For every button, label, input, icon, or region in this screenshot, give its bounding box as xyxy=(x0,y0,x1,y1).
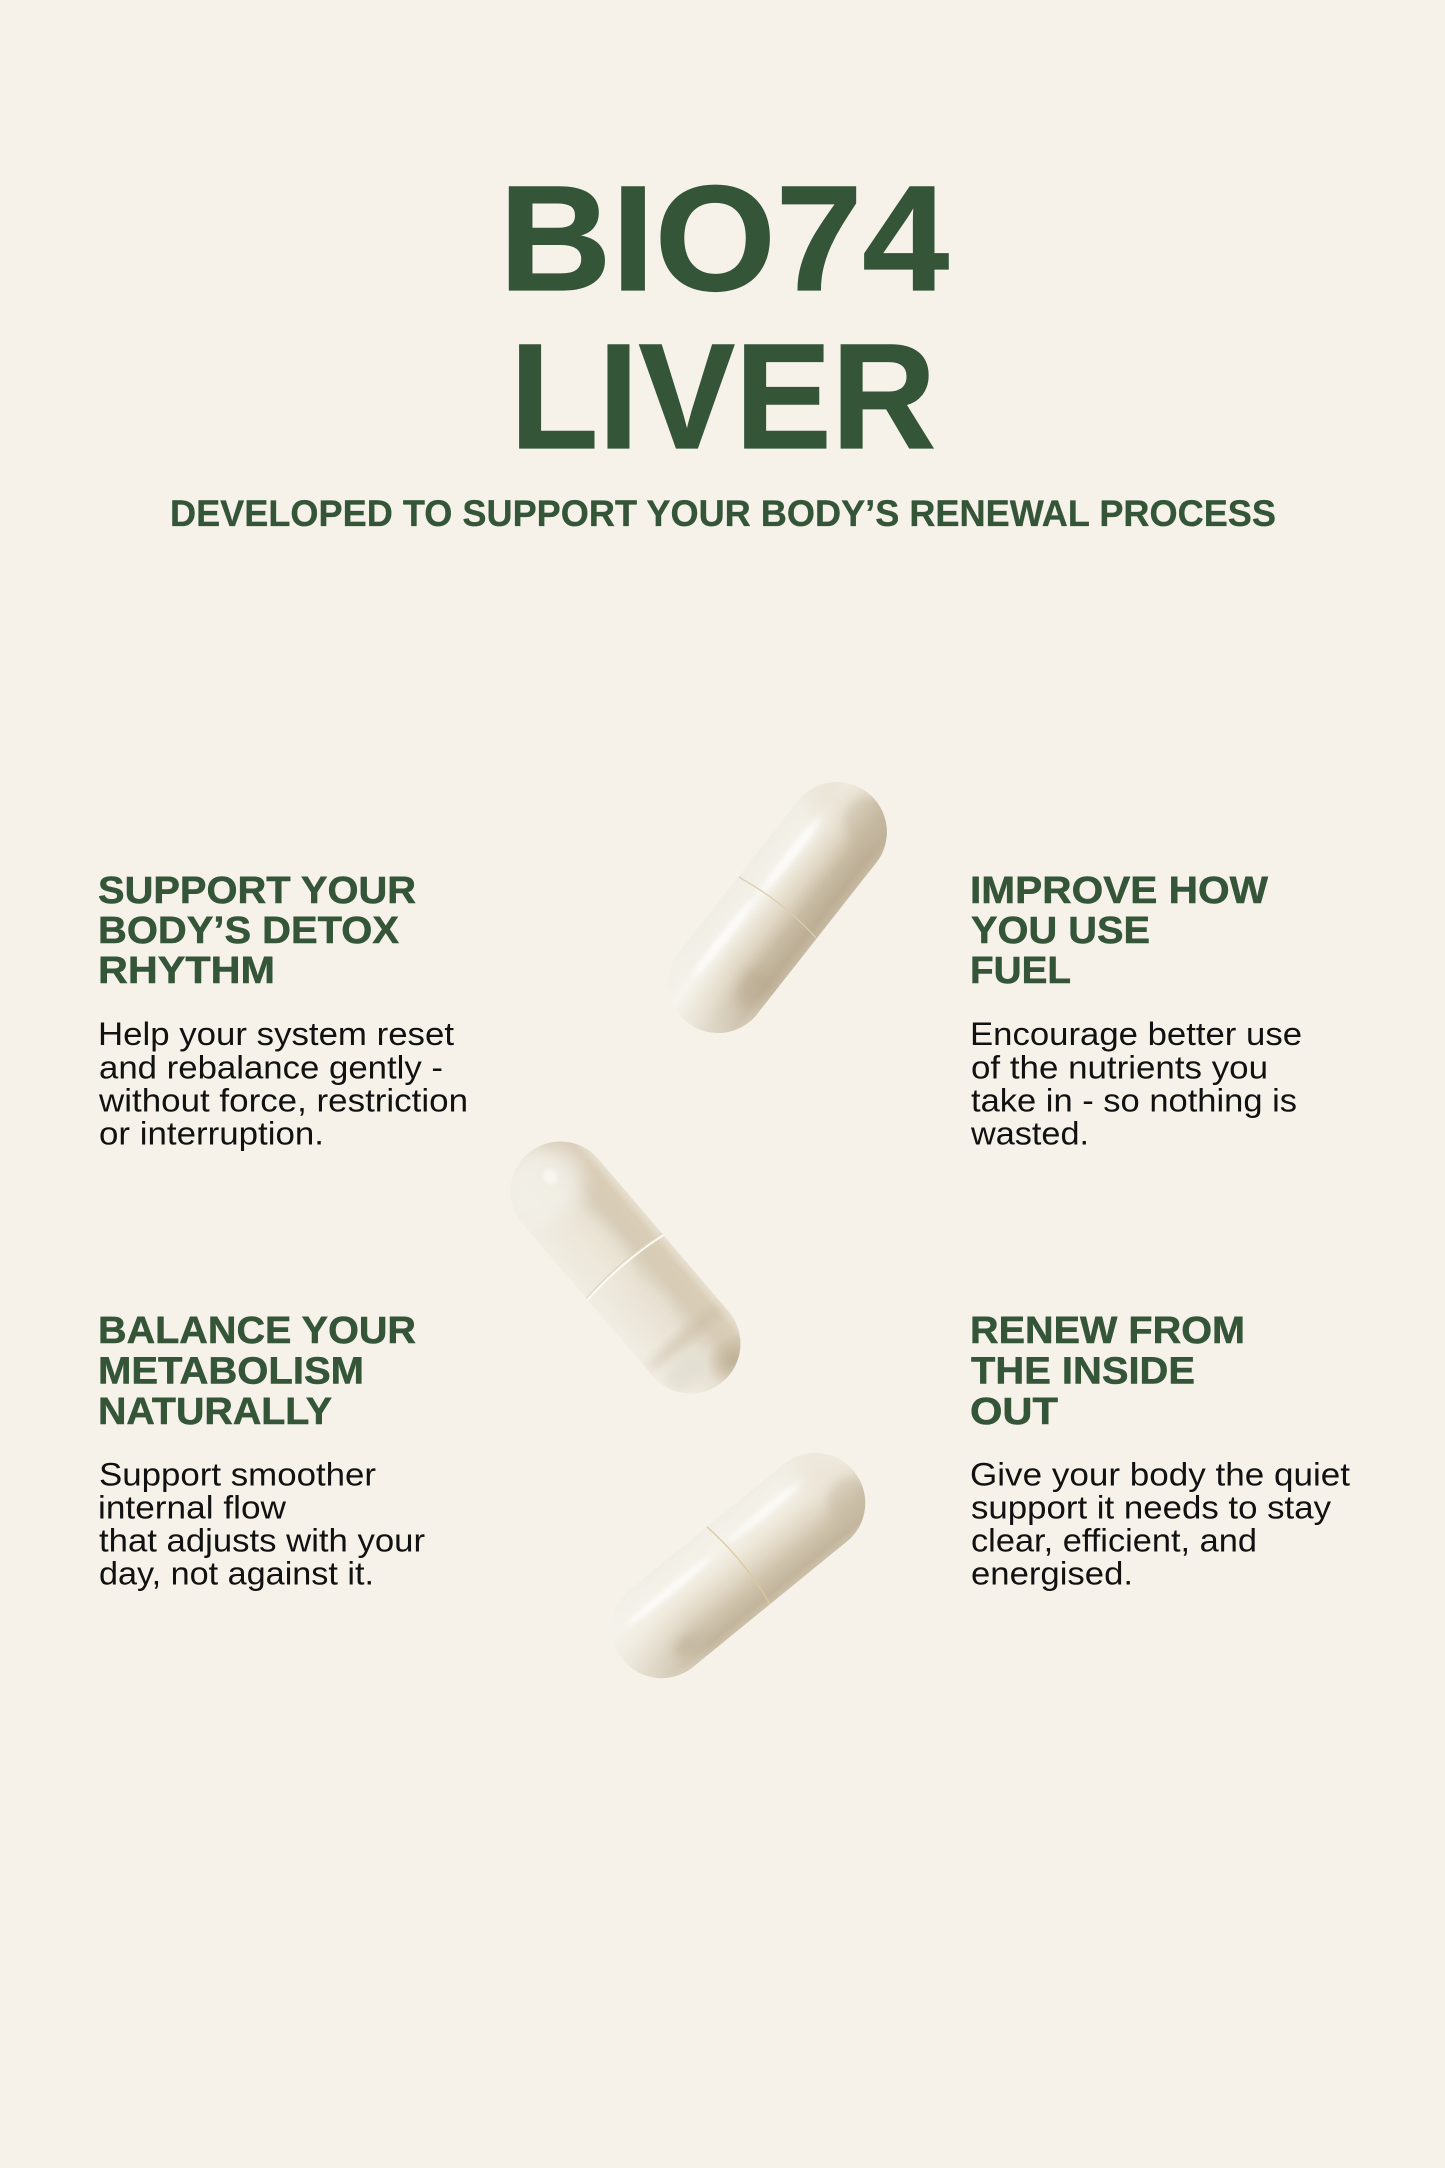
panel: support your body's detox rhythm xyxy=(98,870,468,1152)
capsule: middle left xyxy=(516,1142,740,1394)
heading xyxy=(98,870,416,992)
body text: clear, efficient, and xyxy=(971,1522,1257,1558)
title: LIVER xyxy=(510,312,936,480)
heading: METABOLISM xyxy=(98,1350,364,1392)
body text: Give your body the quiet xyxy=(970,1456,1350,1492)
body text: take in - so nothing is xyxy=(971,1082,1297,1118)
heading: RENEW FROM xyxy=(970,1310,1245,1352)
body text: that adjusts with your xyxy=(99,1522,425,1558)
heading: BODY’S DETOX xyxy=(98,910,400,952)
heading xyxy=(970,870,1268,992)
body text: day, not against it. xyxy=(99,1556,374,1592)
infographic canvas xyxy=(98,184,1350,1678)
panel: improve how you use fuel xyxy=(970,870,1302,1152)
capsule: top right xyxy=(681,782,887,1033)
heading: FUEL xyxy=(970,950,1071,992)
body text: energised. xyxy=(971,1556,1133,1592)
body text: internal flow xyxy=(98,1490,287,1526)
body text: of the nutrients you xyxy=(971,1050,1268,1086)
panel: balance your metabolism naturally xyxy=(98,1310,425,1592)
body text xyxy=(98,1456,425,1592)
heading: IMPROVE HOW xyxy=(970,870,1268,912)
capsule: bottom xyxy=(620,1453,866,1678)
body text: or interruption. xyxy=(99,1116,324,1152)
body text xyxy=(970,1456,1350,1592)
body text: wasted. xyxy=(970,1116,1089,1152)
body text xyxy=(970,1016,1302,1152)
heading: OUT xyxy=(970,1391,1058,1433)
title: BIO74 xyxy=(499,154,949,322)
body text: and rebalance gently - xyxy=(99,1050,443,1086)
body text: without force, restriction xyxy=(98,1082,468,1118)
heading xyxy=(970,1310,1245,1433)
body text: support it needs to stay xyxy=(971,1490,1331,1526)
heading xyxy=(98,1310,416,1433)
subtitle: DEVELOPED TO SUPPORT YOUR BODY’S RENEWAL PROCESS xyxy=(170,493,1276,534)
body text: Support smoother xyxy=(99,1456,376,1492)
heading: RHYTHM xyxy=(98,950,275,992)
body text: Encourage better use xyxy=(970,1016,1302,1052)
body text: Help your system reset xyxy=(98,1016,454,1052)
heading: NATURALLY xyxy=(98,1391,332,1433)
heading: BALANCE YOUR xyxy=(98,1310,416,1352)
heading: YOU USE xyxy=(971,910,1150,952)
panel: renew from the inside out xyxy=(970,1310,1350,1592)
body text xyxy=(98,1016,468,1152)
heading: SUPPORT YOUR xyxy=(98,870,416,912)
heading: THE INSIDE xyxy=(971,1350,1195,1392)
title xyxy=(499,154,949,480)
